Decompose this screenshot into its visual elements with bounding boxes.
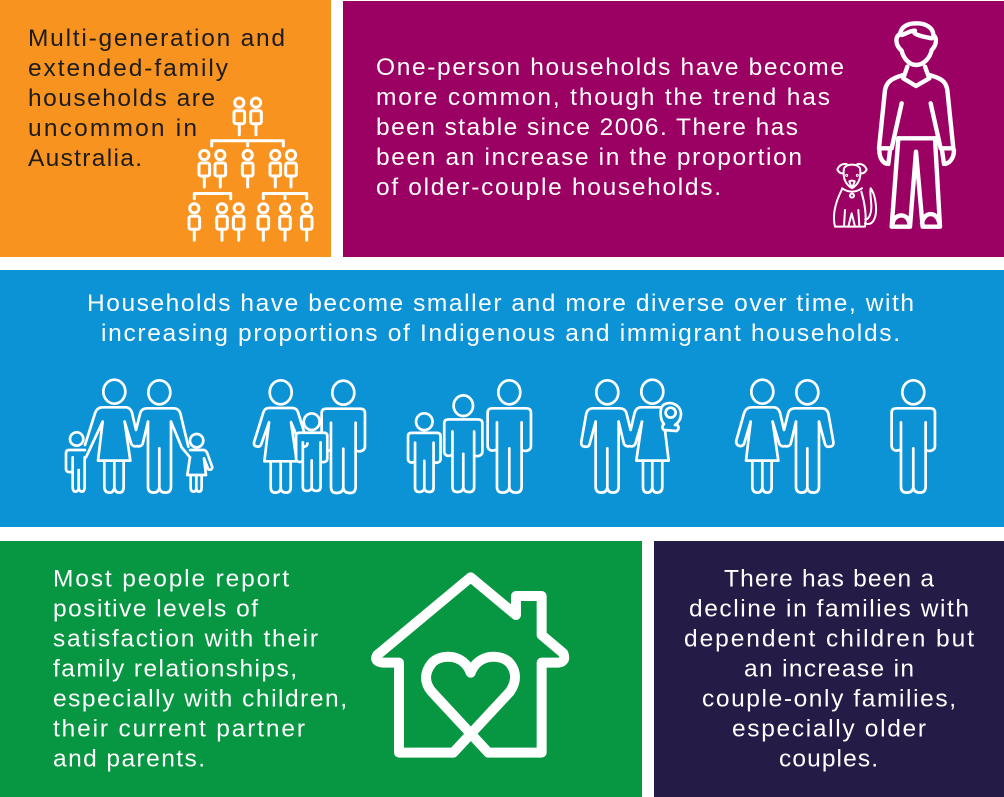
- text: one-person households statement: been stable since 2006. There has: [376, 114, 798, 141]
- panel: one-person households: [343, 1, 1004, 257]
- text: satisfaction statement: satisfaction with their: [53, 626, 318, 652]
- text: family changes statement: an increase in: [744, 656, 914, 682]
- panel: multi-generation households: [0, 0, 331, 257]
- text: family changes statement: dependent children but: [684, 626, 974, 652]
- icon: family tree: [189, 98, 312, 240]
- text: multi-generation statement: Australia.: [28, 145, 142, 172]
- text: one-person households statement: more common, though the trend has: [376, 84, 830, 111]
- icon: single person: [892, 380, 935, 493]
- text: one-person households statement: of older-couple households.: [376, 174, 721, 201]
- text: family changes statement: [684, 566, 974, 772]
- text: satisfaction statement: and parents.: [53, 746, 205, 772]
- text: family changes statement: couples.: [779, 746, 878, 772]
- panel: family satisfaction: [0, 541, 642, 797]
- text: satisfaction statement: especially with children,: [53, 686, 347, 712]
- text: family changes statement: decline in families with: [689, 596, 969, 622]
- text: satisfaction statement: positive levels of: [53, 596, 258, 622]
- text: one-person households statement: One-person households have become: [376, 54, 844, 81]
- text: households heading: [87, 290, 914, 347]
- text: satisfaction statement: their current partner: [53, 716, 305, 742]
- text: multi-generation statement: Multi-generation and: [28, 25, 285, 52]
- icon: couple with child between: [254, 380, 365, 493]
- text: satisfaction statement: Most people report: [53, 566, 289, 592]
- icon: three males of different ages: [408, 380, 531, 493]
- icon: couple: [736, 380, 833, 493]
- text: one-person households statement: [376, 54, 844, 201]
- icon: couple with baby: [581, 380, 681, 493]
- text: multi-generation statement: extended-family: [28, 55, 229, 82]
- text: satisfaction statement: family relationships,: [53, 656, 297, 682]
- panel: family type changes: [654, 541, 1004, 797]
- text: households heading: increasing proportions of Indigenous and immigrant households.: [101, 320, 900, 347]
- icon: family with two children: [66, 380, 212, 493]
- panel: smaller and more diverse households: [0, 270, 1004, 527]
- icon: house with heart: [376, 577, 564, 753]
- text: multi-generation statement: uncommon in: [28, 115, 197, 142]
- text: multi-generation statement: [28, 25, 285, 172]
- text: family changes statement: especially older: [732, 716, 926, 742]
- icon: dog: [834, 164, 876, 227]
- icon: man: [879, 23, 954, 227]
- text: one-person households statement: been an increase in the proportion: [376, 144, 802, 171]
- text: family changes statement: couple-only families,: [702, 686, 956, 712]
- text: satisfaction statement: [53, 566, 347, 772]
- text: multi-generation statement: households are: [28, 85, 215, 112]
- text: family changes statement: There has been a: [724, 566, 934, 592]
- text: households heading: Households have become smaller and more diverse over time, with: [87, 290, 914, 317]
